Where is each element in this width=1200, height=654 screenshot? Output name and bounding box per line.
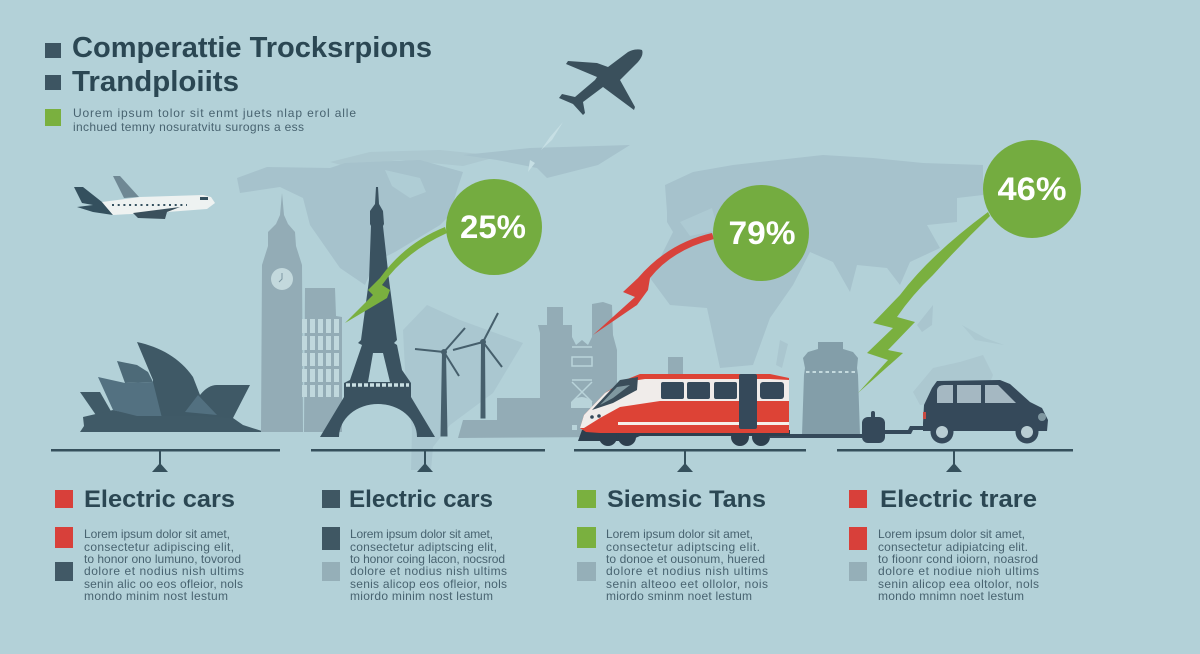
body text: miordo minim nost lestum xyxy=(350,589,493,603)
body text: Lorem ipsum dolor sit amet, xyxy=(606,527,753,541)
ground scale one xyxy=(51,449,280,472)
callout: 79%: 79% xyxy=(728,215,796,251)
panel: electric trare xyxy=(849,486,1039,603)
chimney xyxy=(668,357,683,377)
panel: electric cars one xyxy=(55,486,244,603)
body text: senin alicop eea oltolor, nols xyxy=(878,577,1039,591)
body text: to honor coing lacon, nocsrod xyxy=(350,552,505,566)
body text: dolore et nodius nish ultims xyxy=(606,564,768,578)
icon: dark airplane xyxy=(559,49,642,115)
icon: dark van xyxy=(923,380,1048,444)
body text: dolore et nodius nish ultims xyxy=(350,564,507,578)
title line two: Trandploiits xyxy=(72,66,239,98)
heading: Siemsic Tans xyxy=(607,486,766,513)
arrow: red bolt to 79% xyxy=(593,233,714,335)
callout: 25% xyxy=(446,179,542,275)
body text: mondo mnimn noet lestum xyxy=(878,589,1024,603)
body text: Lorem ipsum dolor sit amet, xyxy=(84,527,230,541)
title line one: Comperattie Trocksrpions xyxy=(72,32,432,64)
body text: mondo minim nost lestum xyxy=(84,589,228,603)
title bullet top xyxy=(45,43,61,58)
cable and plug xyxy=(770,411,925,443)
icon: Eiffel Tower xyxy=(320,187,435,437)
heading: Electric trare xyxy=(880,486,1037,513)
callout: 79% xyxy=(713,185,809,281)
ground scale four xyxy=(837,449,1073,472)
body text: Lorem ipsum dolor sit amet, xyxy=(878,527,1025,541)
callout: 46% xyxy=(983,140,1081,238)
body text: to honor ono lumuno, tovorod xyxy=(84,552,241,566)
ground scale three xyxy=(574,449,806,472)
body text: consectetur adiptscing elit. xyxy=(606,540,760,554)
body text: dolore et nodius nish ultims xyxy=(84,564,244,578)
heading: Electric cars xyxy=(349,486,493,513)
icon: Sydney Opera House xyxy=(80,342,265,432)
subtitle xyxy=(45,106,356,134)
body text: miordo sminm noet lestum xyxy=(606,589,752,603)
icon: stepped skyline xyxy=(458,302,617,438)
icon: white airplane xyxy=(74,176,215,219)
world map xyxy=(237,145,1004,470)
body text: consectetur adipiatcing elit. xyxy=(878,540,1028,554)
body text: consectetur adiptscing elit, xyxy=(350,540,497,554)
body text xyxy=(84,527,244,603)
arrow: green bolt to 46% xyxy=(858,212,990,393)
panel: siemsic tans xyxy=(577,486,768,603)
contrail xyxy=(528,122,563,172)
body text: to donoe et ousonum, huered xyxy=(606,552,765,566)
heading: Electric cars xyxy=(84,486,235,513)
ground scale two xyxy=(311,449,545,472)
body text xyxy=(878,527,1039,603)
icon: Big Ben and building xyxy=(261,193,342,432)
icon: wind turbines xyxy=(415,313,502,436)
body text: consectetur adipiscing elit, xyxy=(84,540,234,554)
title bullet bottom xyxy=(45,75,61,90)
icon: red train xyxy=(578,374,790,446)
subtitle line two: inchued temny nosuratvitu surogns a ess xyxy=(73,120,304,134)
icon: water tower xyxy=(802,342,860,435)
panel: electric cars two xyxy=(322,486,507,603)
body text: to fioonr cond ioiorn, noasrod xyxy=(878,552,1038,566)
title xyxy=(45,32,432,98)
arrow: green bolt to 25% xyxy=(345,227,447,323)
body text: Lorem ipsum dolor sit amet, xyxy=(350,527,493,541)
body text: senin alic oo eos ofleior, nols xyxy=(84,577,243,591)
body text: dolore et nodiue nioh ultims xyxy=(878,564,1039,578)
subtitle bullet xyxy=(45,109,61,126)
body text xyxy=(606,527,768,603)
body text: senin alteoo eet ollolor, nois xyxy=(606,577,768,591)
body text: senis alicop eos ofleior, nols xyxy=(350,577,507,591)
body text xyxy=(350,527,507,603)
callout: 46%: 46% xyxy=(998,171,1066,207)
callout: 25%: 25% xyxy=(460,209,526,245)
subtitle line one: Uorem ipsum tolor sit enmt juets nlap erol alle xyxy=(73,106,356,120)
